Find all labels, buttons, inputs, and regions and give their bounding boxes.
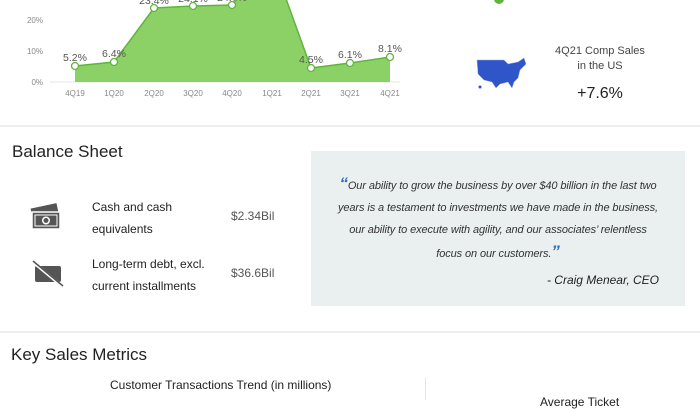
icon: US map bbox=[476, 58, 526, 88]
chart: comp sales growth area chart: 1Q20 bbox=[104, 89, 124, 98]
chart: comp sales growth area chart: 1Q21 bbox=[262, 89, 282, 98]
row: cash: equivalents bbox=[92, 222, 153, 236]
panel: CEO quote: “Our ability to grow the business by over $40 billion in the last two bbox=[339, 174, 657, 193]
data labels: 6.1% bbox=[338, 49, 362, 61]
data labels: 5.2% bbox=[63, 52, 87, 64]
chart: comp sales growth area chart: 0% bbox=[31, 78, 43, 87]
data labels: 4.5% bbox=[299, 54, 323, 66]
row: debt: Long-term debt, excl. bbox=[92, 257, 205, 271]
area series bbox=[72, 0, 394, 82]
panel: CEO quote bbox=[311, 151, 685, 306]
panel: CEO quote: focus on our customers.” bbox=[436, 242, 560, 261]
chart: comp sales growth area chart bbox=[27, 0, 402, 98]
text: average ticket (partial): Average Ticket bbox=[540, 395, 619, 409]
chart: comp sales growth area chart: 4Q20 bbox=[222, 89, 242, 98]
row: cash: $2.34Bil bbox=[231, 209, 274, 223]
icon: crossed card bbox=[32, 260, 64, 286]
data labels bbox=[63, 0, 402, 66]
text: comp sales US bbox=[555, 45, 645, 102]
chart: comp sales growth area chart: 3Q21 bbox=[340, 89, 360, 98]
text: comp sales US: +7.6% bbox=[577, 85, 623, 102]
chart: comp sales growth area chart: 4Q21 bbox=[380, 89, 400, 98]
row: cash bbox=[30, 200, 274, 236]
icon: green circle (partial) bbox=[494, 0, 504, 4]
panel: CEO quote: years is a testament to investments we have made in the business, bbox=[338, 202, 658, 214]
row: debt bbox=[32, 257, 274, 293]
chart: comp sales growth area chart: 10% bbox=[27, 47, 43, 56]
chart: comp sales growth area chart: 4Q19 bbox=[65, 89, 85, 98]
text: comp sales US: in the US bbox=[577, 60, 623, 72]
chart: comp sales growth area chart: 3Q20 bbox=[183, 89, 203, 98]
data labels: 8.1% bbox=[378, 43, 402, 55]
heading: Balance Sheet: Balance Sheet bbox=[12, 142, 123, 161]
panel: CEO quote: - Craig Menear, CEO bbox=[547, 273, 659, 287]
text: comp sales US: 4Q21 Comp Sales bbox=[555, 45, 645, 57]
icon: cash bbox=[30, 203, 60, 228]
heading: Key Sales Metrics: Key Sales Metrics bbox=[11, 345, 147, 364]
chart: comp sales growth area chart: 2Q21 bbox=[301, 89, 321, 98]
row: debt: current installments bbox=[92, 279, 196, 293]
row: cash: Cash and cash bbox=[92, 200, 172, 214]
data labels: 6.4% bbox=[102, 48, 126, 60]
chart: comp sales growth area chart: 2Q20 bbox=[144, 89, 164, 98]
chart title: customer transactions: Customer Transactions Trend (in millions) bbox=[110, 378, 331, 392]
chart: comp sales growth area chart: 20% bbox=[27, 16, 43, 25]
row: debt: $36.6Bil bbox=[231, 266, 274, 280]
panel: CEO quote: our ability to execute with agility, and our associates’ relentless bbox=[349, 224, 647, 236]
